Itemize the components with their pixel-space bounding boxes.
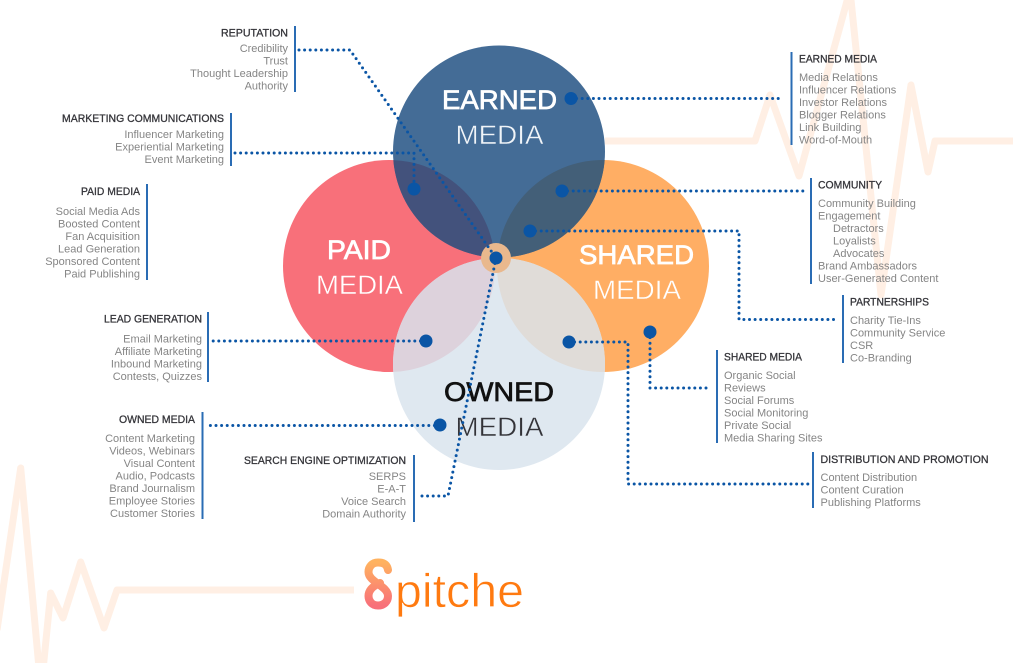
panel: distribution and promotion: Content Distribution: [820, 472, 917, 484]
panel: distribution and promotion: DISTRIBUTION AND PROMOTION: [820, 454, 989, 466]
panel: reputation: Credibility: [240, 43, 288, 55]
panel: owned media: Videos, Webinars: [109, 446, 195, 458]
panel: distribution and promotion: Publishing Platforms: [820, 497, 921, 509]
circle: owned media: [393, 258, 605, 470]
panel: lead generation: LEAD GENERATION: [104, 314, 202, 326]
panel: partnerships: [843, 295, 945, 364]
panel: marketing communications: Event Marketing: [145, 154, 224, 166]
circle: paid media: [283, 160, 495, 372]
panel: earned media: Influencer Relations: [799, 84, 897, 96]
overlap: paid and owned: [393, 260, 495, 372]
panel: paid media: Boosted Content: [58, 218, 140, 230]
connector: owned media: [207, 424, 440, 427]
panel: owned media: [105, 412, 202, 520]
label: paid media: [316, 235, 403, 300]
label: shared media: [579, 240, 694, 305]
panel: community: Advocates: [833, 248, 885, 260]
panel: paid media: Sponsored Content: [45, 256, 140, 268]
connector nodes: [408, 92, 656, 432]
connector: community: [562, 190, 805, 192]
circle: earned media: [393, 46, 605, 258]
panel: search engine optimization: SERPS: [369, 471, 406, 483]
panel: lead generation: Inbound Marketing: [111, 358, 202, 370]
icon: S mark: [368, 562, 388, 606]
venn diagram: [283, 46, 709, 470]
label: earned media: [442, 85, 557, 150]
panel: partnerships: PARTNERSHIPS: [850, 296, 929, 308]
panel: earned media: Word-of-Mouth: [799, 134, 872, 146]
panel: earned media: Blogger Relations: [799, 110, 886, 122]
panel: paid media: [45, 184, 147, 280]
panel: owned media: Employee Stories: [109, 496, 195, 508]
panel: reputation: REPUTATION: [221, 28, 288, 40]
panel: marketing communications: MARKETING COMMUNICATIONS: [62, 113, 224, 125]
background pulse line: bottom left: [0, 468, 354, 663]
panel: community: Community Building: [818, 198, 916, 210]
label: shared media: MEDIA: [593, 275, 681, 305]
panel: lead generation: [104, 312, 208, 383]
label: shared media: SHARED: [579, 240, 694, 270]
panel: paid media: PAID MEDIA: [81, 186, 141, 198]
label: owned media: OWNED: [444, 377, 554, 407]
panel: earned media: Link Building: [799, 122, 861, 134]
panel: search engine optimization: Voice Search: [341, 496, 406, 508]
panel: search engine optimization: [244, 455, 414, 522]
panel: lead generation: Contests, Quizzes: [113, 371, 202, 383]
label: paid media: PAID: [327, 235, 391, 265]
overlap: shared and earned: [500, 160, 605, 257]
panel: shared media: SHARED MEDIA: [724, 352, 803, 364]
panel: partnerships: Co-Branding: [850, 352, 912, 364]
overlap: paid and earned: [393, 160, 492, 256]
panel: distribution and promotion: [813, 452, 989, 509]
panel: paid media: Fan Acquisition: [65, 231, 140, 243]
panel: earned media: EARNED MEDIA: [799, 54, 878, 66]
panel: owned media: OWNED MEDIA: [119, 414, 196, 426]
center circle: [481, 243, 511, 273]
panel: reputation: [190, 26, 295, 92]
panel: distribution and promotion: Content Curation: [820, 484, 904, 496]
panel: community: User-Generated Content: [818, 273, 938, 285]
label: earned media: MEDIA: [456, 120, 544, 150]
panel: shared media: Media Sharing Sites: [724, 432, 823, 444]
connector: shared media: [650, 332, 711, 388]
panel: search engine optimization: Domain Authority: [322, 508, 406, 520]
panel: earned media: Media Relations: [799, 72, 878, 84]
logo wordmark: pitche: [395, 564, 524, 617]
panel: shared media: Social Monitoring: [724, 408, 808, 420]
panel: search engine optimization: SEARCH ENGINE OPTIMIZATION: [244, 455, 406, 467]
panel: paid media: Lead Generation: [58, 244, 140, 256]
panel: reputation: Thought Leadership: [190, 68, 288, 80]
panel: owned media: Audio, Podcasts: [116, 470, 195, 482]
panel: shared media: Social Forums: [724, 395, 795, 407]
panel: community: Engagement: [818, 210, 880, 222]
panel: partnerships: Charity Tie-Ins: [850, 315, 921, 327]
connector: reputation: [299, 50, 496, 258]
label: owned media: [444, 377, 554, 442]
connector: lead generation: [213, 340, 426, 342]
connector: partnerships: [530, 231, 837, 320]
connector: earned media: [571, 97, 781, 100]
label: owned media: MEDIA: [456, 412, 544, 442]
panel: paid media: Paid Publishing: [64, 268, 140, 280]
connector: marketing communications: [235, 153, 414, 189]
panel: community: Detractors: [833, 223, 884, 235]
panel: partnerships: Community Service: [850, 328, 945, 340]
panel: owned media: Customer Stories: [110, 508, 195, 520]
overlap: shared and owned: [497, 258, 605, 372]
panel: earned media: Investor Relations: [799, 97, 888, 109]
panel: marketing communications: Experiential Marketing: [115, 142, 224, 154]
panel: shared media: Reviews: [724, 382, 766, 394]
panel: community: Brand Ambassadors: [818, 260, 918, 272]
panel: paid media: Social Media Ads: [56, 206, 140, 218]
label: earned media: EARNED: [442, 85, 557, 115]
connector: distribution and promotion: [569, 342, 808, 484]
logo: Spitche: [368, 562, 524, 617]
panel: marketing communications: [62, 113, 231, 166]
panel: owned media: Content Marketing: [105, 433, 195, 445]
panel: owned media: Brand Journalism: [109, 483, 195, 495]
label: paid media: MEDIA: [316, 270, 403, 300]
panel: community: Loyalists: [833, 236, 876, 248]
panel: shared media: Private Social: [724, 420, 791, 432]
panel: shared media: [717, 350, 823, 444]
circle: shared media: [497, 160, 709, 372]
panel: owned media: Visual Content: [124, 458, 195, 470]
panel: reputation: Trust: [263, 56, 288, 68]
panel: shared media: Organic Social: [724, 370, 796, 382]
panel: earned media: [792, 52, 897, 146]
background pulse line: top right: [605, 0, 1013, 295]
panel: lead generation: Affiliate Marketing: [115, 346, 202, 358]
panel: community: COMMUNITY: [818, 180, 883, 192]
panel: marketing communications: Influencer Marketing: [124, 129, 224, 141]
panel: search engine optimization: E-A-T: [377, 484, 406, 496]
connector: search engine optimization: [418, 258, 496, 496]
panel: lead generation: Email Marketing: [123, 334, 202, 346]
panel: community: [811, 178, 938, 285]
panel: reputation: Authority: [245, 80, 288, 92]
panel: partnerships: CSR: [850, 340, 873, 352]
